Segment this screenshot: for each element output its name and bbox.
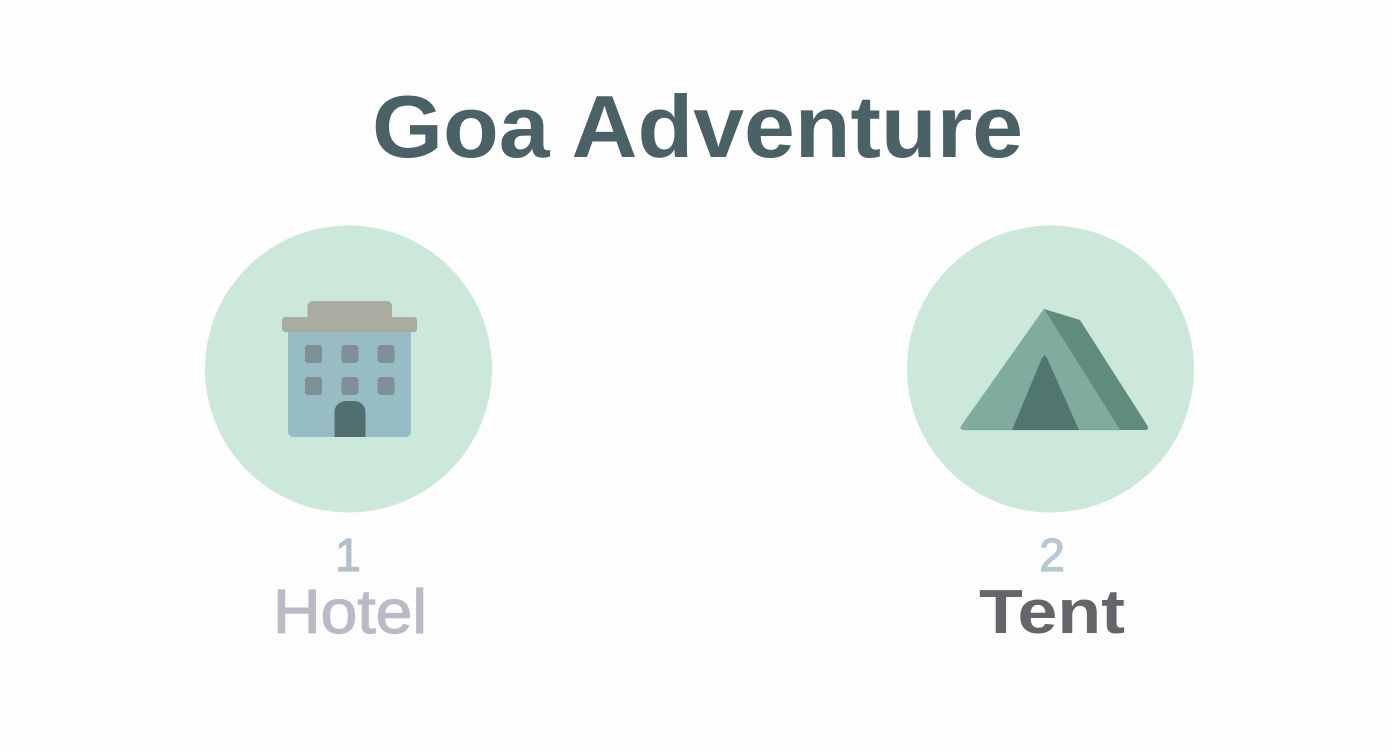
hotel background circle <box>205 226 492 512</box>
tent number: 2 <box>1039 529 1065 581</box>
panel: hotel option <box>205 226 492 647</box>
icon: hotel <box>282 301 417 437</box>
icon: tent <box>961 309 1148 430</box>
title: Goa Adventure <box>372 77 1023 176</box>
panel: tent option <box>907 226 1194 647</box>
tent label: Tent <box>979 578 1125 647</box>
hotel number: 1 <box>335 529 361 581</box>
hotel label: Hotel <box>273 578 427 647</box>
tent background circle <box>907 226 1194 512</box>
